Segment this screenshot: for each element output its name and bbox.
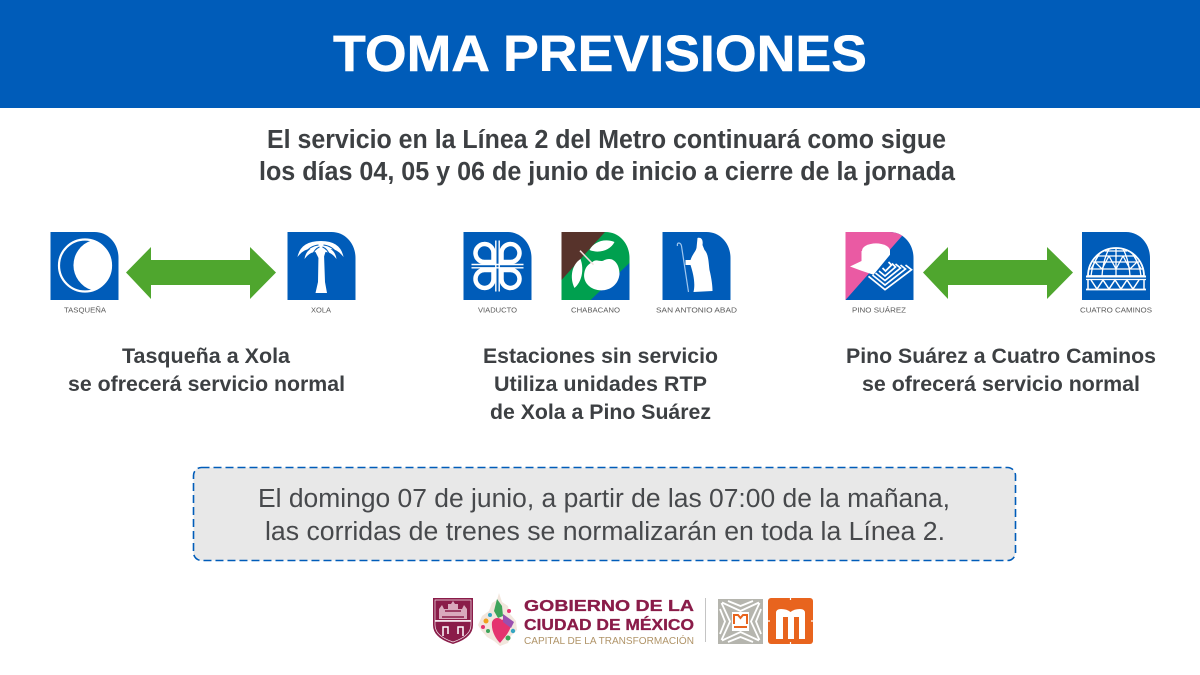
icon: Chabacano station: CHABACANO [571, 308, 621, 315]
logos footer [433, 593, 813, 647]
icon: Cuatro Caminos station: CUATRO CAMINOS [1080, 308, 1152, 315]
title banner: TOMA PREVISIONES [333, 25, 867, 82]
icon: Metro pattern logo [718, 599, 763, 644]
icon: San Antonio Abad station: SAN ANTONIO ABAD [656, 308, 737, 315]
caption [483, 344, 718, 424]
wordmark: Gobierno de la Ciudad de México: CAPITAL DE LA TRANSFORMACIÓN [524, 634, 694, 647]
caption: Estaciones sin servicio [483, 344, 718, 368]
callout: Sunday normalization: El domingo 07 de junio, a partir de las 07:00 de la mañana, [258, 485, 950, 513]
caption: de Xola a Pino Suárez [490, 400, 711, 424]
caption [68, 344, 345, 396]
arrow: green double arrow [126, 247, 276, 299]
caption: Tasqueña a Xola [122, 344, 291, 368]
intro text: los días 04, 05 y 06 de junio de inicio a cierre de la jornada [259, 158, 956, 186]
icon: Viaducto station [464, 232, 532, 315]
icon: Metro M logo [768, 598, 813, 644]
caption: se ofrecerá servicio normal [862, 372, 1140, 396]
icon: Pino Suárez station: PINO SUÁREZ [852, 306, 907, 315]
intro text: El servicio en la Línea 2 del Metro continuará como sigue [267, 126, 946, 154]
arrow: green double arrow [923, 247, 1073, 299]
callout: Sunday normalization: las corridas de trenes se normalizarán en toda la Línea 2. [265, 518, 945, 546]
icon: Mexico City map emblem [478, 593, 517, 646]
intro text [259, 126, 956, 186]
wordmark: Gobierno de la Ciudad de México: CIUDAD DE MÉXICO [524, 615, 694, 634]
title banner [0, 0, 1200, 108]
icon: Cuatro Caminos station [1080, 232, 1152, 315]
panel: Tasqueña to Xola [50, 232, 356, 396]
icon: Tasqueña station: TASQUEÑA [64, 306, 106, 315]
caption: Pino Suárez a Cuatro Caminos [846, 344, 1156, 368]
wordmark: Gobierno de la Ciudad de México [524, 598, 695, 647]
icon: Pino Suárez station [846, 232, 914, 315]
panel: stations without service [464, 232, 737, 424]
caption: se ofrecerá servicio normal [68, 372, 345, 396]
icon: Tasqueña station [50, 232, 118, 315]
icon: San Antonio Abad station [656, 232, 737, 315]
icon: city coat of arms [433, 598, 473, 644]
caption [846, 344, 1156, 396]
icon: Chabacano station [562, 232, 632, 315]
icon: Xola station: XOLA [311, 308, 331, 315]
panel: Pino Suárez to Cuatro Caminos [846, 232, 1156, 396]
callout: Sunday normalization [194, 468, 1016, 560]
wordmark: Gobierno de la Ciudad de México: GOBIERNO DE LA [524, 598, 695, 615]
icon: Xola station [288, 232, 356, 315]
caption: Utiliza unidades RTP [494, 372, 707, 396]
icon: Viaducto station: VIADUCTO [478, 308, 518, 315]
